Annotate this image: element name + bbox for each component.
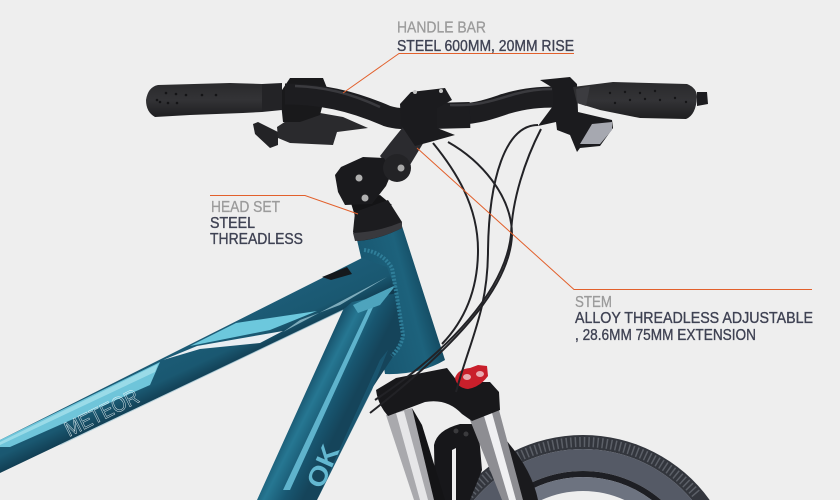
fork and brake arch	[376, 368, 538, 500]
callout: handle bar	[343, 20, 574, 93]
left grip	[146, 83, 282, 117]
spec: handle bar: STEEL 600MM, 20MM RISE	[397, 38, 574, 55]
bicycle photo illustration	[0, 77, 710, 500]
right brake lever and shifter	[538, 77, 613, 152]
red fork lockout dial	[455, 365, 488, 389]
spec: stem line 1: ALLOY THREADLESS ADJUSTABLE	[575, 310, 813, 327]
down tube logo: OK	[300, 440, 345, 492]
stem	[335, 117, 430, 205]
frame: top tube	[0, 258, 397, 473]
leader line: stem	[417, 148, 812, 290]
spec: head set: STEEL	[210, 215, 255, 232]
spec: stem line 2: , 28.6MM 75MM EXTENSION	[575, 327, 756, 344]
handlebar	[285, 86, 558, 119]
top tube cyan stripe	[0, 362, 160, 447]
heading: head set: HEAD SET	[211, 199, 280, 216]
handlebar clamp	[400, 88, 455, 146]
frame: down tube	[257, 285, 403, 500]
callout: head set	[210, 196, 358, 248]
leader line: handle bar	[343, 54, 574, 93]
headset	[350, 195, 402, 241]
left shifter	[253, 78, 368, 148]
head badge	[322, 267, 352, 280]
frame: head tube	[357, 226, 445, 374]
front wheel	[456, 435, 710, 500]
spec: threadless: THREADLESS	[210, 231, 303, 248]
heading: stem: STEM	[575, 294, 612, 311]
heading: handle bar: HANDLE BAR	[397, 20, 486, 36]
leader line: head set	[210, 196, 358, 214]
top tube upper graphic	[190, 311, 317, 346]
weld beads	[364, 250, 403, 356]
model decal: METEOR	[61, 385, 143, 441]
right grip	[573, 82, 708, 119]
brake and shift cables	[370, 125, 541, 413]
callout: stem	[417, 148, 813, 344]
